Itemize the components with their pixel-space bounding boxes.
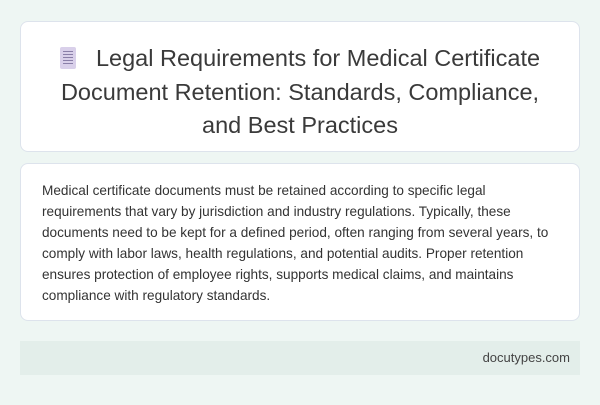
- title: Legal Requirements for Medical Certificate Document Retention: Standards, Compliance, and Best Practices: [61, 45, 540, 138]
- panel: title card: [20, 21, 580, 152]
- footer: [20, 341, 580, 375]
- panel: description: [20, 163, 580, 321]
- icon: document scroll: [60, 47, 76, 69]
- footer text: docutypes.com: [483, 350, 570, 365]
- text block: Medical certificate documents must be retained according to specific legal requirements that vary by jurisdiction and industry regulations. Typically, these documents need to be kept for a defined period, often ranging from several years, to comply with labor laws, health regulations, and potential audits. Proper retention ensures protection of employee rights, supports medical claims, and maintains compliance with regulatory standards.: [42, 183, 548, 303]
